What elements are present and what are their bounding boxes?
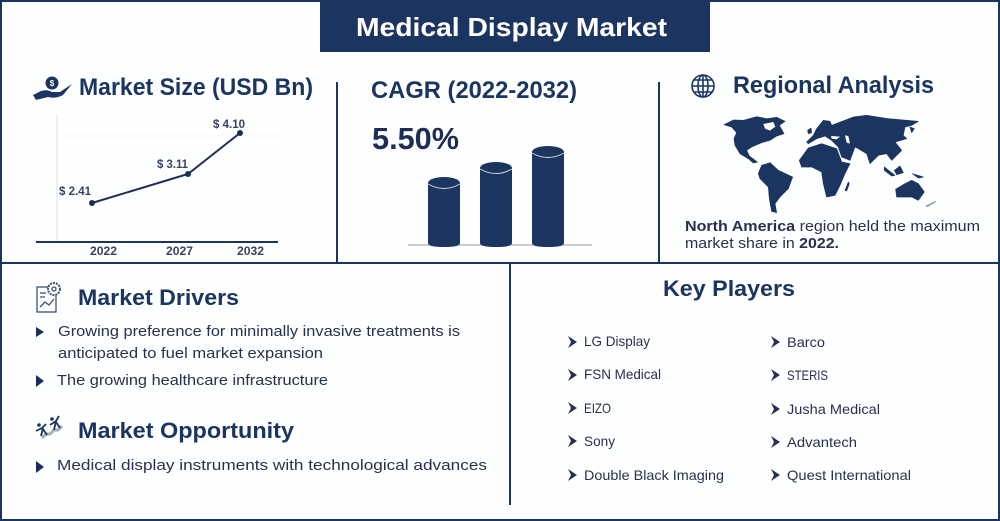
icon: figures climbing steps: [36, 416, 62, 438]
line chart: 2027: [166, 244, 193, 258]
list: key players left column: LG Display: [584, 333, 650, 349]
list: key players left column: EIZO: [584, 400, 611, 416]
regional text: [685, 218, 980, 252]
list: key players right column: [771, 334, 911, 483]
line chart: 2022: [90, 244, 117, 258]
bullet: driver 1: [36, 323, 460, 362]
line chart: $ 4.10: [213, 117, 245, 131]
panel: regional analysis: [685, 72, 980, 252]
bullet: driver 2: The growing healthcare infrastructure: [57, 372, 328, 389]
list: key players right column: Quest International: [787, 467, 911, 483]
heading: CAGR: CAGR (2022-2032): [371, 77, 577, 104]
regional text: market share in 2022.: [685, 235, 839, 252]
CAGR value: 5.50%: [372, 121, 459, 156]
world map: [724, 115, 937, 213]
title: Medical Display Market: [356, 12, 667, 42]
icon: hand holding coin: [33, 76, 72, 100]
list: key players right column: Barco: [787, 334, 825, 350]
list: key players right column: Jusha Medical: [787, 401, 880, 417]
heading: market size: Market Size (USD Bn): [79, 74, 313, 101]
list: key players left column: Double Black Imaging: [584, 467, 724, 483]
line chart: $ 3.11: [157, 157, 188, 171]
bar chart: cylinders: [408, 146, 592, 247]
panel: market size: [33, 74, 313, 258]
bullet: driver 1: Growing preference for minimally invasive treatments is: [58, 323, 460, 340]
panel: market drivers and opportunity: [36, 283, 487, 474]
panel: CAGR: [371, 77, 592, 247]
panel: key players: [568, 276, 911, 483]
list: key players left column: Sony: [584, 433, 615, 449]
list: key players right column: Advantech: [787, 434, 857, 450]
heading: regional analysis: Regional Analysis: [733, 72, 934, 99]
icon: hand holding coin: $: [50, 79, 55, 88]
list: key players right column: STERIS: [787, 367, 828, 383]
line chart: [36, 115, 280, 258]
bullet: opportunity 1: Medical display instruments with technological advances: [57, 457, 487, 474]
heading: key players: Key Players: [663, 276, 795, 301]
line chart: $ 2.41: [59, 184, 91, 198]
icon: globe: [692, 75, 714, 97]
icon: chart report with gear: [37, 283, 60, 312]
regional text: North America region held the maximum: [685, 218, 980, 235]
line chart: 2032: [237, 244, 264, 258]
heading: market opportunity: Market Opportunity: [78, 418, 295, 443]
bullet: driver 1: anticipated to fuel market expansion: [58, 345, 323, 362]
heading: market drivers: Market Drivers: [78, 285, 239, 310]
list: key players left column: [568, 333, 724, 483]
title: [320, 0, 710, 52]
list: key players left column: FSN Medical: [584, 366, 661, 382]
